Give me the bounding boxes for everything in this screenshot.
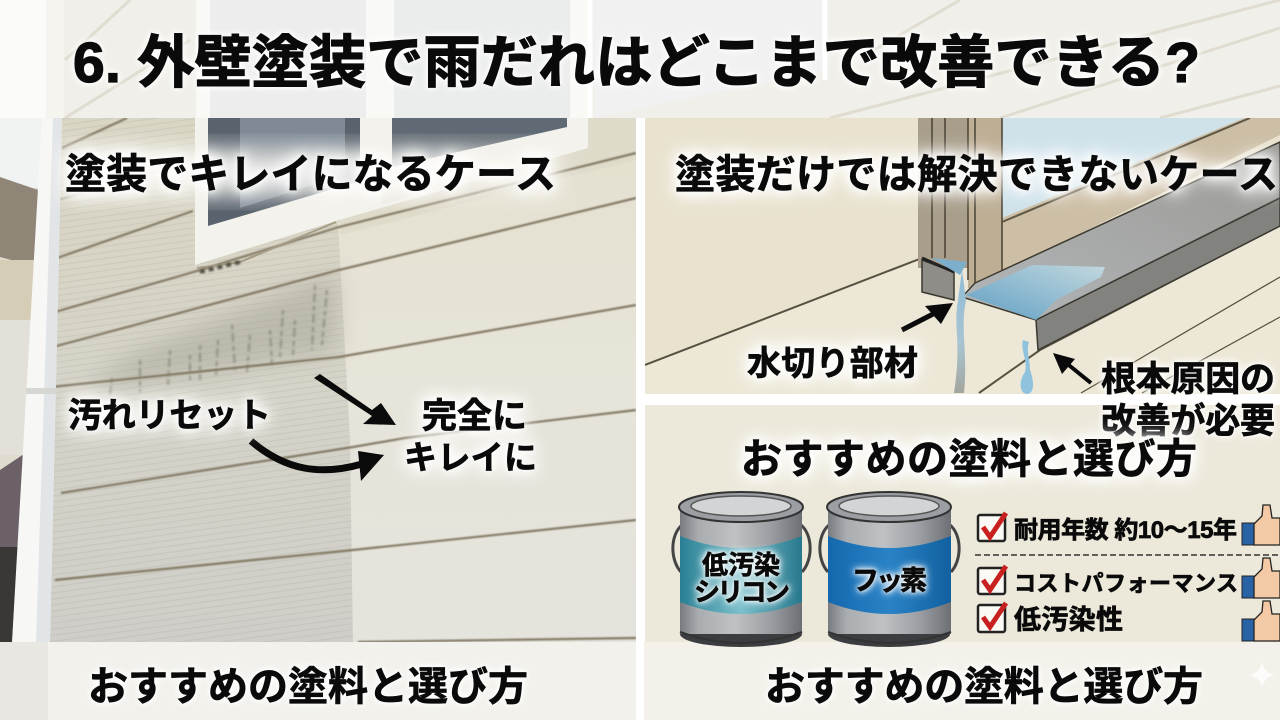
label: flashing part: 水切り部材 bbox=[747, 345, 918, 383]
item: cost performance: コストパフォーマンス bbox=[1014, 571, 1238, 596]
siding wall right (repainted) bbox=[338, 222, 636, 642]
label: root cause: 改善が必要 bbox=[1101, 402, 1275, 441]
heading: cleanable case: 塗装でキレイになるケース bbox=[65, 151, 556, 197]
siding wall left (stained) bbox=[40, 118, 353, 642]
sky and neighbouring houses bbox=[0, 118, 42, 642]
arrow: curved bbox=[251, 441, 384, 481]
label: completely clean bbox=[404, 397, 537, 476]
icon: thumbs up 1 bbox=[1242, 505, 1280, 545]
heading: unsolvable case: 塗装だけでは解決できないケース bbox=[675, 153, 1278, 197]
panel: unsolvable case illustration bbox=[645, 118, 1280, 394]
panel: recommended paints bbox=[645, 405, 1280, 642]
panel: cleanable case photo bbox=[0, 118, 636, 642]
arrow: to root cause bbox=[1053, 353, 1091, 383]
label: root cause bbox=[1101, 360, 1275, 441]
footer band right bbox=[644, 642, 1280, 720]
downspout bbox=[12, 118, 62, 642]
checklist bbox=[975, 513, 1280, 635]
footer text left: おすすめの塗料と選び方 bbox=[88, 665, 528, 709]
can label text: シリコン bbox=[694, 577, 790, 607]
water pool bbox=[966, 265, 1105, 320]
footer band left bbox=[0, 642, 636, 720]
heading: recommended paints: おすすめの塗料と選び方 bbox=[741, 436, 1197, 482]
title: 6. 外壁塗装で雨だれはどこまで改善できる? bbox=[73, 31, 1200, 95]
icon: thumbs up 3 bbox=[1242, 601, 1280, 641]
label: completely clean: キレイに bbox=[404, 439, 537, 476]
lower siding bbox=[645, 150, 1280, 394]
icon: thumbs up 2 bbox=[1242, 558, 1280, 598]
footer text right: おすすめの塗料と選び方 bbox=[765, 665, 1203, 709]
can label text: フッ素 bbox=[852, 566, 927, 596]
window glass bbox=[1002, 118, 1244, 218]
label: stain reset: 汚れリセット bbox=[68, 397, 271, 435]
can label text: 低汚染 bbox=[702, 550, 780, 580]
item: low stain: 低汚染性 bbox=[1014, 605, 1123, 635]
white halo behind left heading bbox=[60, 148, 560, 196]
siding lines bbox=[51, 118, 636, 642]
water drips bbox=[954, 270, 1033, 394]
rain stain bbox=[80, 272, 338, 395]
icon: sparkle bbox=[1249, 662, 1275, 688]
arrow: straight bbox=[314, 374, 396, 425]
label: completely clean: 完全に bbox=[422, 397, 527, 436]
paint can: fluorine bbox=[820, 492, 959, 647]
window bbox=[195, 118, 588, 272]
window frame bbox=[918, 118, 1280, 288]
label: root cause: 根本原因の bbox=[1101, 360, 1275, 399]
item: durability: 耐用年数 約10〜15年 bbox=[1014, 517, 1237, 544]
drip edge sill bbox=[922, 142, 1280, 350]
arrow: to flashing bbox=[902, 303, 953, 330]
can label text bbox=[694, 550, 790, 607]
paint can: low-stain silicone bbox=[673, 492, 810, 647]
header background photo bbox=[0, 0, 1280, 118]
